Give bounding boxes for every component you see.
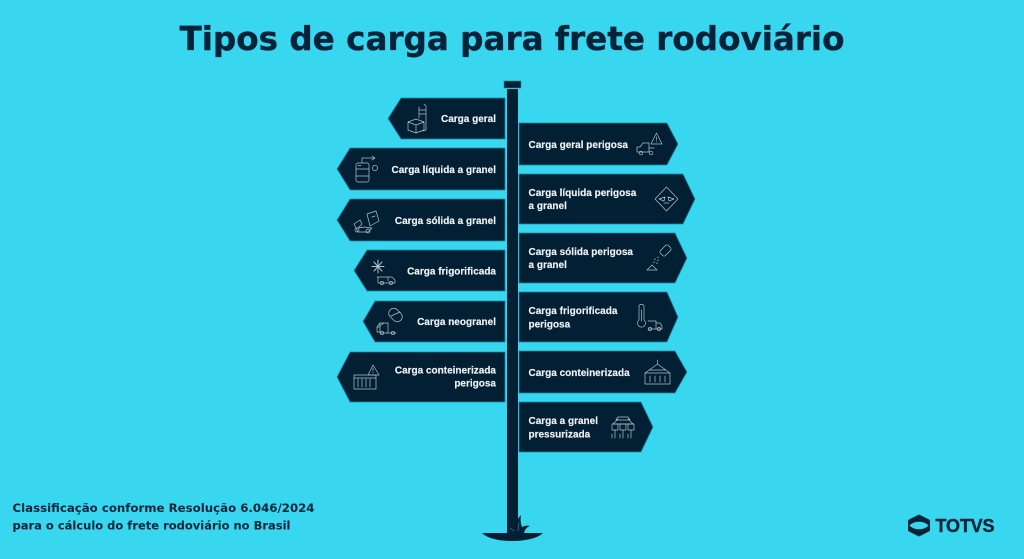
- sign: Carga geral perigosa: Carga geral perigosa: [528, 140, 628, 151]
- icon: dump truck: [354, 211, 379, 233]
- sign: Carga líquida perigosa a granel: Carga líquida perigosa: [528, 188, 637, 199]
- sign: Carga sólida a granel: Carga sólida a granel: [395, 216, 496, 227]
- logo: TOTVS: TOTVS: [936, 516, 994, 536]
- title: Tipos de carga para frete rodoviário: [180, 20, 844, 58]
- icon: box and hand truck: [408, 104, 426, 133]
- icon: thermometer and truck: [638, 304, 662, 331]
- icon: container with warning: [354, 365, 379, 389]
- sign: Carga geral: [388, 98, 505, 139]
- sign: Carga líquida perigosa a granel: a granel: [528, 201, 567, 212]
- sign: Carga conteinerizada: Carga conteinerizada: [528, 368, 630, 379]
- icon: capsule and truck: [377, 306, 404, 335]
- sign: Carga sólida perigosa a granel: Carga sólida perigosa: [528, 247, 633, 258]
- footnote: [12, 501, 314, 532]
- sign: Carga conteinerizada perigosa: Carga conteinerizada: [395, 366, 496, 376]
- sign: Carga neogranel: [363, 301, 505, 342]
- sign: Carga a granel pressurizada: [519, 402, 653, 452]
- sign: Carga frigorificada perigosa: [519, 292, 678, 342]
- sign: Carga frigorificada: [354, 250, 505, 291]
- sign: Carga conteinerizada perigosa: perigosa: [454, 378, 496, 390]
- sign: Carga sólida perigosa a granel: [519, 233, 687, 283]
- icon: hazard diamond: [655, 187, 678, 211]
- icon: liquid tank: [356, 156, 378, 182]
- sign: Carga conteinerizada: [519, 351, 687, 393]
- sign: Carga neogranel: Carga neogranel: [417, 317, 496, 328]
- sign: Carga sólida perigosa a granel: a granel: [528, 260, 567, 271]
- sign: Carga geral perigosa: [519, 123, 678, 165]
- icon: snowflake and truck: [372, 260, 395, 285]
- logo: TOTVS: [908, 514, 994, 536]
- sign: Carga geral: Carga geral: [441, 114, 496, 125]
- icon: pressurized tanks: [612, 417, 634, 438]
- icon: container on crane hook: [645, 360, 670, 384]
- sign: Carga líquida perigosa a granel: [519, 174, 695, 224]
- sign: Carga frigorificada perigosa: perigosa: [528, 320, 571, 330]
- sign: Carga frigorificada: Carga frigorificada: [407, 266, 496, 278]
- signpost pole: [482, 81, 543, 541]
- footnote: para o cálculo do frete rodoviário no Brasil: [12, 518, 290, 532]
- sign: Carga frigorificada perigosa: Carga frigorificada: [528, 306, 618, 317]
- footnote: Classificação conforme Resolução 6.046/2024: [12, 501, 314, 515]
- sign: Carga a granel pressurizada: Carga a granel: [528, 416, 598, 427]
- sign: Carga a granel pressurizada: pressurizada: [528, 430, 591, 440]
- icon: scoop pouring solids: [647, 244, 672, 270]
- sign: Carga conteinerizada perigosa: [337, 352, 505, 402]
- sign: Carga líquida a granel: [337, 148, 505, 190]
- sign: Carga sólida a granel: [337, 199, 505, 241]
- sign: Carga líquida a granel: Carga líquida a granel: [392, 165, 496, 176]
- icon: truck with warning: [637, 133, 662, 155]
